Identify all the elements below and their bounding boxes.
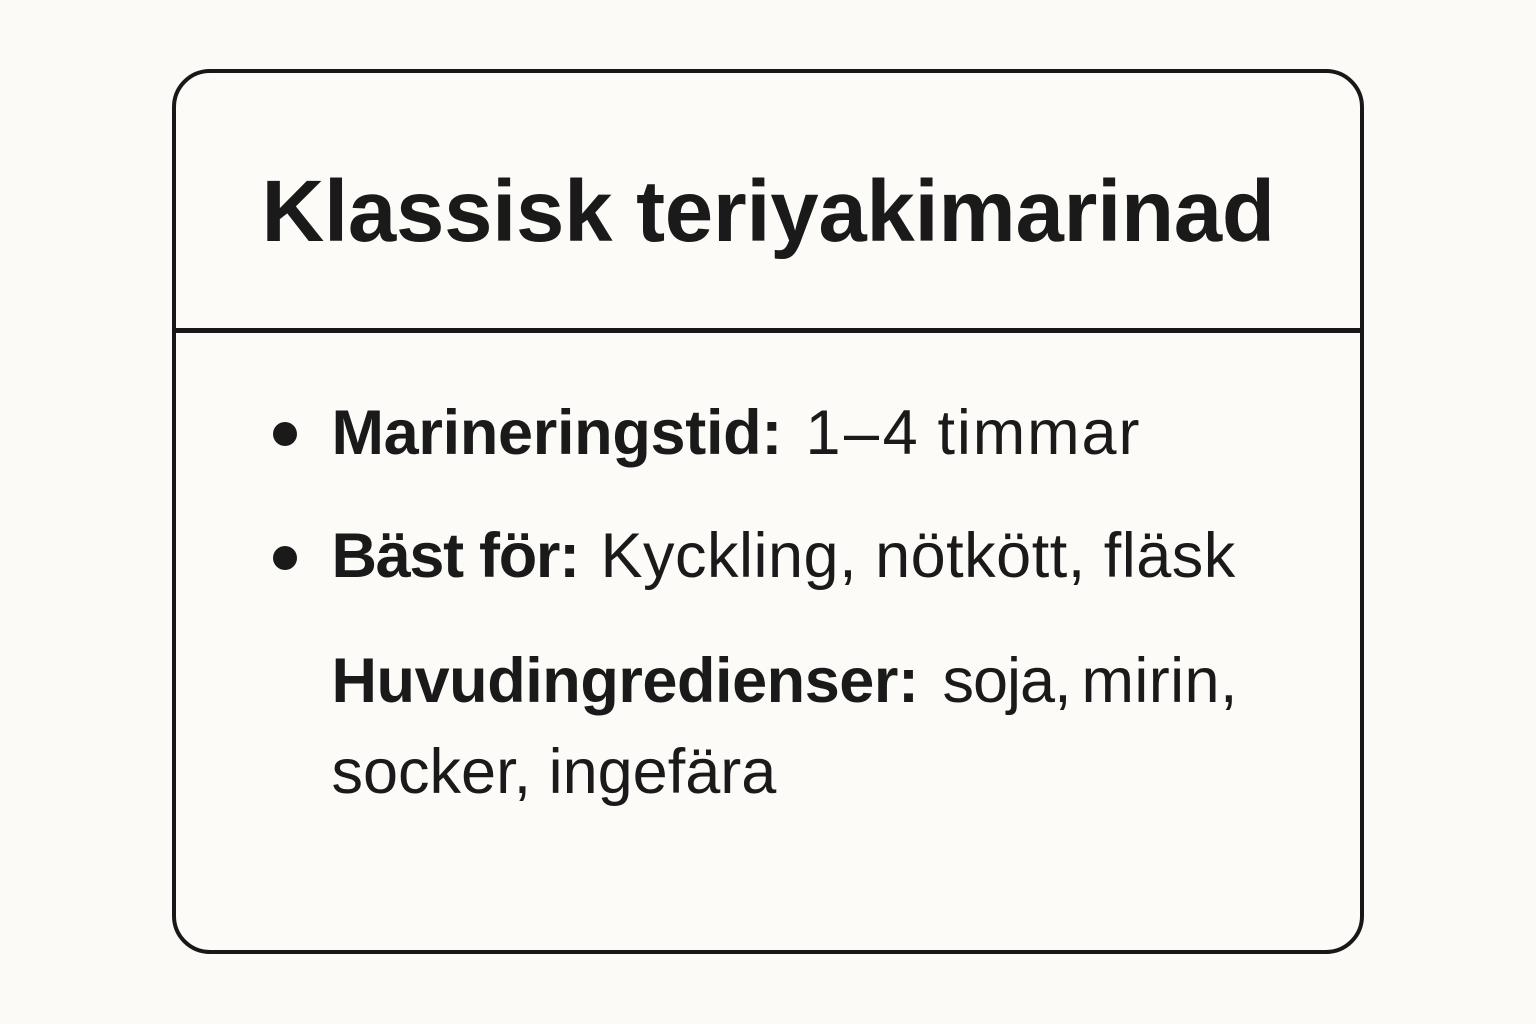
text: huvudingredienser line 1: soja, [942, 646, 1071, 716]
text: marineringstid: 1–4 [806, 398, 921, 468]
text: huvudingredienser line 1: Huvudingredienser: [332, 646, 918, 716]
bullet icon: bäst för [272, 546, 296, 570]
text: bäst för: Bäst för: [332, 521, 579, 591]
panel: recipe card [172, 69, 1364, 954]
text: huvudingredienser line 1 [332, 646, 1238, 716]
bullet icon: marineringstid [272, 422, 296, 446]
title: Klassisk teriyakimarinad [262, 163, 1275, 260]
text: marineringstid: timmar [938, 398, 1141, 468]
text: huvudingredienser line 1: mirin, [1082, 646, 1238, 716]
text: huvudingredienser line 2: socker, ingefära [332, 737, 776, 807]
text: marineringstid [332, 398, 1141, 468]
text: bäst för: Kyckling, nötkött, fläsk [600, 521, 1236, 591]
divider [176, 328, 1360, 333]
text: marineringstid: Marineringstid: [332, 398, 782, 468]
